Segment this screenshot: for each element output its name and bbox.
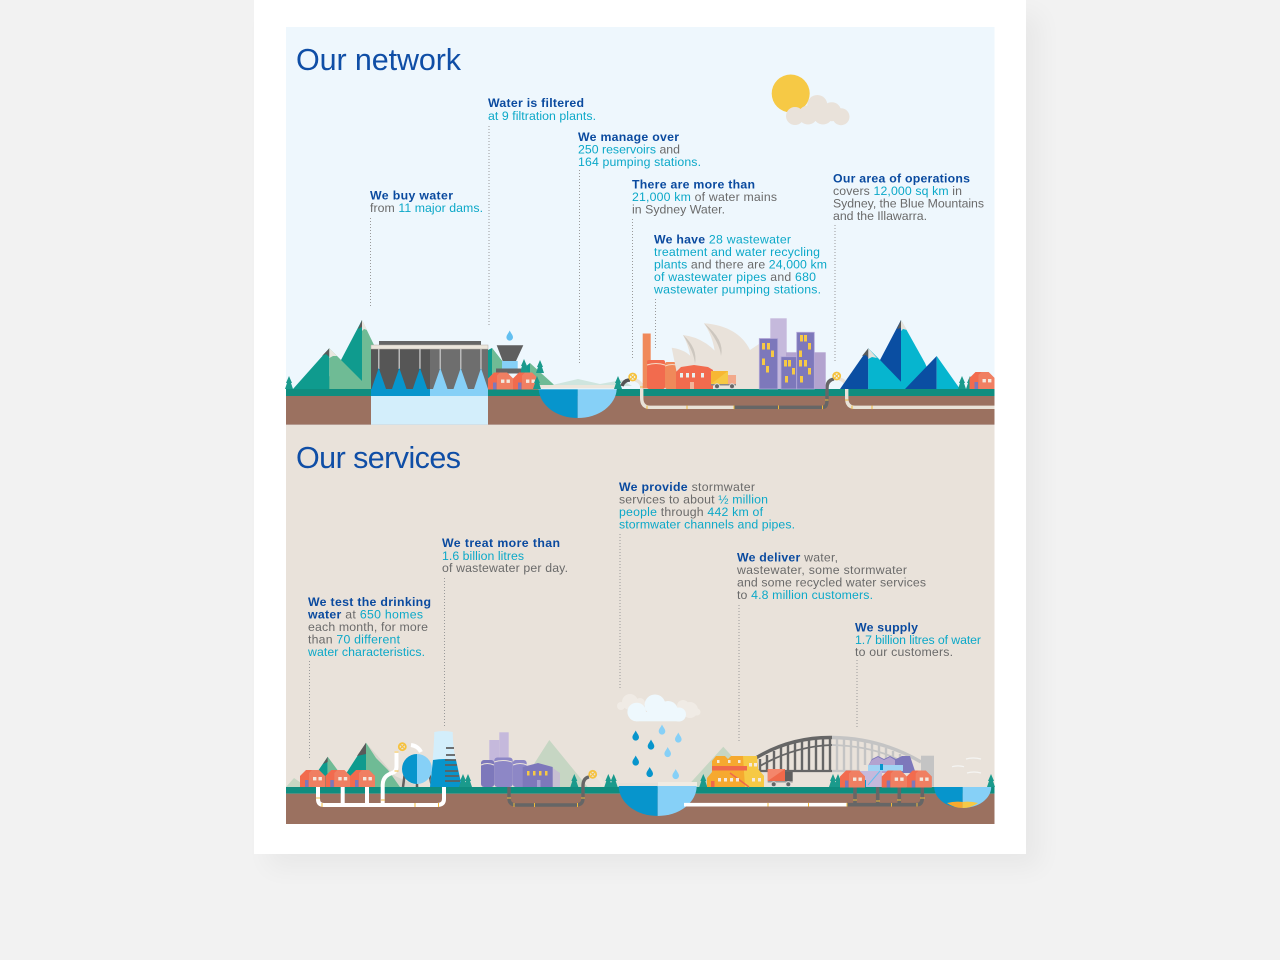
rain cloud bbox=[617, 694, 700, 722]
callout: wastewater treatment: of wastewater pipes and 680 bbox=[654, 270, 816, 284]
harbour bridge bbox=[755, 737, 934, 787]
callout: stormwater: We provide stormwater bbox=[619, 480, 755, 494]
ground: services bbox=[286, 787, 994, 824]
callout: water mains: in Sydney Water. bbox=[632, 202, 725, 216]
callout: drinking water tests bbox=[307, 595, 431, 760]
callout: water is filtered: at 9 filtration plants. bbox=[488, 109, 596, 123]
mountains: right bbox=[840, 320, 974, 389]
callout: area of operations: and the Illawarra. bbox=[833, 209, 927, 223]
callout: stormwater: stormwater channels and pipes. bbox=[619, 518, 795, 532]
rain drops bbox=[632, 724, 682, 779]
truck: yellow bbox=[711, 371, 736, 389]
background hills bbox=[286, 740, 760, 787]
callout: we buy water bbox=[370, 188, 483, 306]
callout: wastewater treated: of wastewater per day. bbox=[442, 561, 568, 575]
callout: we buy water: We buy water bbox=[370, 188, 453, 202]
icon: sun and cloud bbox=[772, 74, 850, 125]
callout: wastewater treated bbox=[442, 536, 568, 728]
houses: harbour bbox=[840, 770, 932, 788]
callout: reservoirs and pumping stations: 250 reservoirs and bbox=[578, 142, 680, 156]
callout: water supply: 1.7 billion litres of water bbox=[855, 633, 981, 647]
storage tank bbox=[402, 754, 432, 787]
houses: test homes bbox=[300, 770, 375, 787]
house: far right bbox=[970, 372, 994, 389]
callout: area of operations: covers 12,000 sq km in bbox=[833, 184, 962, 198]
seagulls bbox=[952, 758, 981, 773]
callout: wastewater treated: We treat more than bbox=[442, 536, 560, 550]
callout: wastewater treatment: wastewater pumping stations. bbox=[653, 282, 821, 296]
ground: network bbox=[286, 389, 994, 425]
panel: our network sky bbox=[286, 27, 994, 425]
callout: water is filtered bbox=[488, 96, 596, 325]
scene: services landscape bbox=[286, 694, 995, 824]
callout: drinking water tests: each month, for more bbox=[308, 620, 428, 634]
heading: our services: Our services bbox=[296, 441, 461, 475]
callout: drinking water tests: water at 650 homes bbox=[307, 608, 423, 622]
callout: reservoirs and pumping stations bbox=[578, 130, 701, 365]
houses: tower bbox=[488, 372, 538, 390]
truck: red bbox=[768, 769, 793, 787]
pipes: houses to basin bbox=[684, 787, 925, 806]
callout: water supply: to our customers. bbox=[855, 645, 953, 659]
building: red bbox=[676, 365, 713, 389]
callout: area of operations: Our area of operations bbox=[833, 172, 970, 186]
callout: drinking water tests: We test the drinking bbox=[308, 595, 431, 609]
trees: harbour bbox=[604, 774, 995, 787]
white sheet bbox=[254, 0, 1026, 854]
callout: drinking water tests: water characteristics. bbox=[307, 645, 425, 659]
dam bbox=[371, 341, 488, 389]
callout: wastewater treated: 1.6 billion litres bbox=[442, 549, 524, 563]
callout: stormwater bbox=[619, 480, 795, 690]
callout: water supply bbox=[855, 620, 981, 728]
callout: we buy water: from 11 major dams. bbox=[370, 201, 483, 215]
stormwater basin bbox=[619, 782, 697, 816]
callout: customers bbox=[736, 550, 926, 743]
callout: water mains bbox=[632, 178, 777, 358]
callout: water is filtered: Water is filtered bbox=[488, 96, 584, 110]
pipes: white bbox=[316, 743, 444, 807]
scene: network landscape bbox=[285, 318, 994, 425]
mountains: left bbox=[285, 320, 374, 389]
callout: wastewater treatment: treatment and water recycling bbox=[654, 245, 820, 259]
callout: wastewater treatment: plants and there are 24,000 km bbox=[654, 258, 827, 272]
callout: water supply: We supply bbox=[855, 620, 918, 634]
cooling tower bbox=[430, 731, 472, 787]
callout: stormwater: services to about ½ million bbox=[619, 492, 768, 506]
callout: customers: and some recycled water services bbox=[737, 576, 926, 590]
callout: stormwater: people through 442 km of bbox=[619, 505, 764, 519]
harbour basin bbox=[934, 787, 991, 808]
callout: reservoirs and pumping stations: We manage over bbox=[578, 130, 679, 144]
heading: our network: Our network bbox=[296, 43, 462, 77]
callout: wastewater treatment bbox=[653, 232, 827, 350]
houses: purple terraces bbox=[859, 756, 915, 787]
callout: water mains: 21,000 km of water mains bbox=[632, 190, 777, 204]
callout: reservoirs and pumping stations: 164 pumping stations. bbox=[578, 155, 701, 169]
callout: wastewater treatment: We have 28 wastewater bbox=[654, 232, 791, 246]
mountains: test homes bbox=[307, 743, 400, 787]
mountains behind tower bbox=[488, 348, 559, 389]
factory: purple bbox=[481, 732, 578, 787]
callout: water mains: There are more than bbox=[632, 178, 755, 192]
callout: drinking water tests: than 70 different bbox=[308, 632, 401, 646]
callout: area of operations: Sydney, the Blue Mountains bbox=[833, 196, 984, 210]
pipes: network bbox=[622, 372, 994, 409]
callout: customers: to 4.8 million customers. bbox=[737, 588, 873, 602]
callout: customers: We deliver water, bbox=[737, 550, 838, 564]
filtration tower bbox=[496, 330, 523, 374]
city buildings bbox=[759, 318, 826, 389]
building: yellow terraces bbox=[707, 756, 764, 787]
reservoir bbox=[533, 376, 632, 418]
callout: customers: wastewater, some stormwater bbox=[736, 563, 907, 577]
panel: our services background bbox=[286, 425, 994, 824]
callout: area of operations bbox=[833, 172, 984, 362]
opera house bbox=[672, 323, 759, 389]
factory bbox=[643, 334, 680, 389]
pipes: dark bbox=[507, 771, 603, 807]
